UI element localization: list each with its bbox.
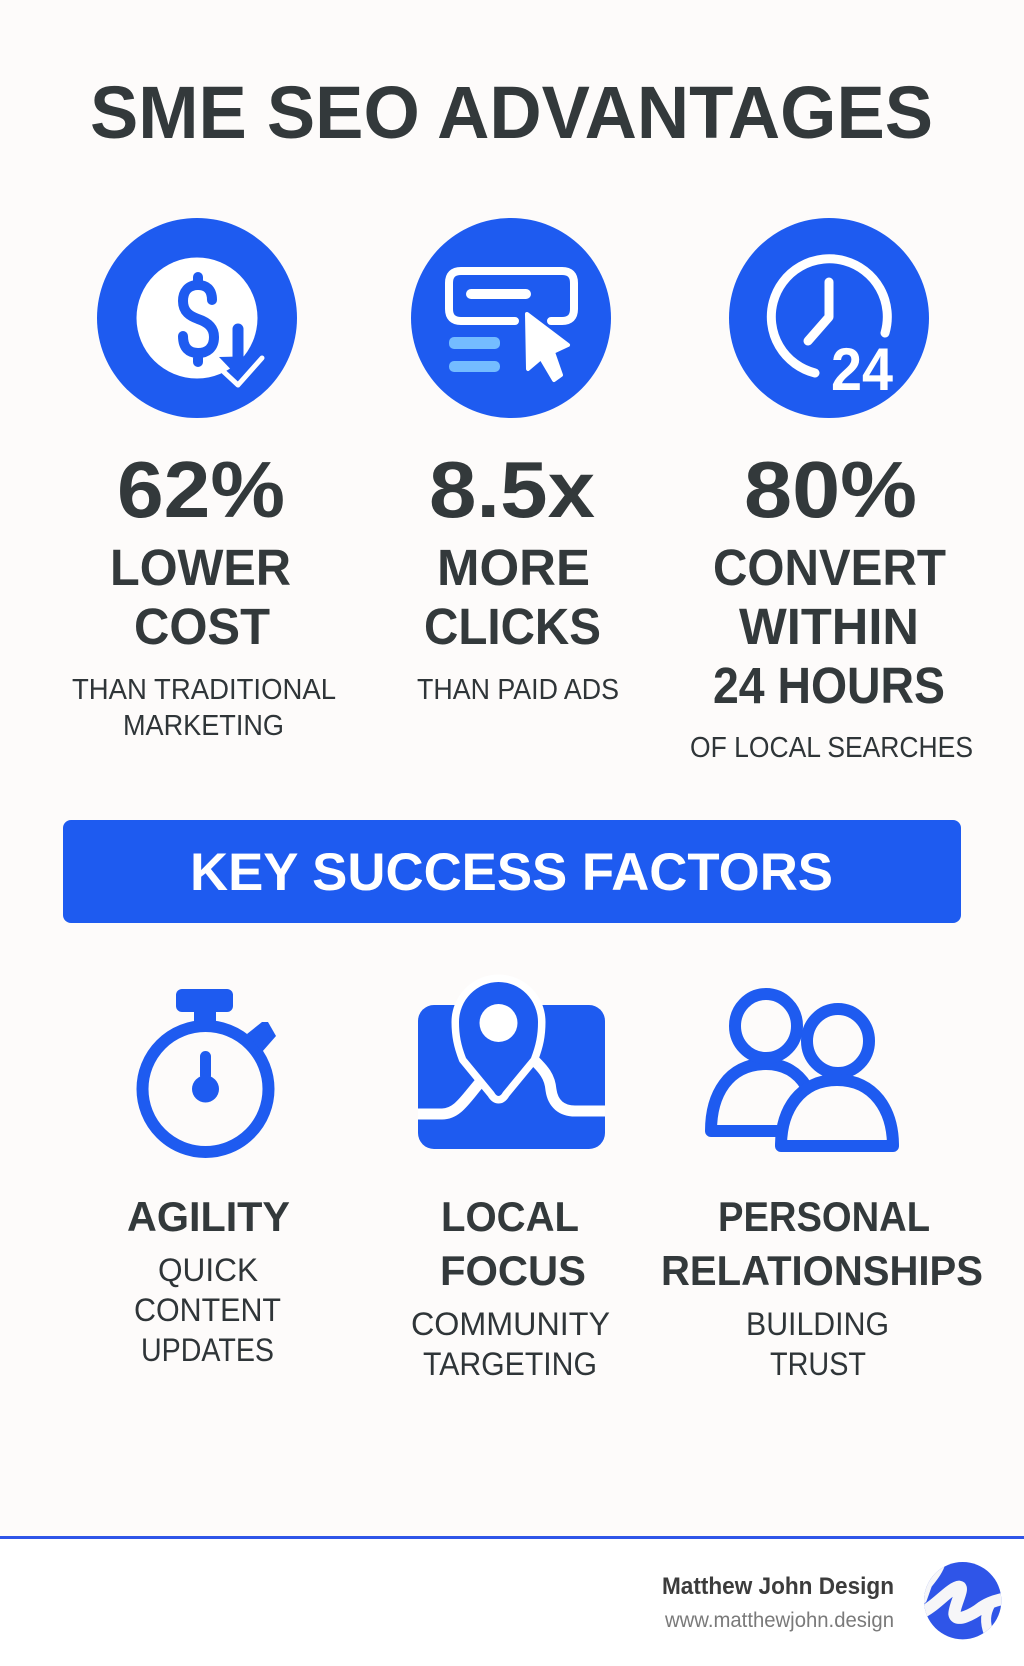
panel: convert within 24 hours stat [690, 218, 973, 764]
footer [0, 1536, 1024, 1640]
stat note: than paid ads: THAN PAID ADS [417, 674, 619, 706]
stat note: of local searches: OF LOCAL SEARCHES [690, 732, 973, 764]
note: quick content updates: CONTENT [134, 1292, 281, 1328]
banner: key success factors: KEY SUCCESS FACTORS [190, 843, 833, 902]
note: quick content updates: UPDATES [141, 1332, 274, 1368]
stat value: 80%: 80% [744, 445, 917, 534]
panel: agility [127, 989, 290, 1368]
stat label: more clicks: CLICKS [424, 598, 601, 655]
icon: two people [711, 994, 893, 1146]
icon: 24 hour clock [729, 218, 929, 418]
label: local focus: FOCUS [440, 1247, 586, 1294]
panel: local focus [411, 982, 610, 1382]
stat label: more clicks [424, 539, 601, 655]
stat label: convert within 24 hours [713, 539, 946, 714]
note: building trust [746, 1306, 889, 1382]
stat value: 62%: 62% [117, 445, 285, 534]
note: community targeting: COMMUNITY [411, 1306, 610, 1342]
stat note: than traditional marketing: THAN TRADITIONAL [72, 674, 336, 706]
icon: logo [924, 1562, 1002, 1640]
footer brand name: Matthew John Design [662, 1573, 894, 1600]
stat label: lower cost: LOWER [110, 539, 291, 596]
note: building trust: BUILDING [746, 1306, 889, 1342]
icon: ad window with cursor [411, 218, 611, 418]
label: personal relationships [661, 1193, 983, 1294]
stat value: 8.5x: 8.5x [429, 445, 595, 534]
icon: stopwatch [142, 989, 276, 1152]
stat label: lower cost: COST [134, 598, 270, 655]
panel: lower cost stat [72, 218, 336, 742]
icon: dollar with down arrow [97, 218, 297, 418]
stat label: more clicks: MORE [437, 539, 590, 596]
icon: 24 hour clock: 24 [831, 336, 894, 403]
icon: map with pin [418, 982, 605, 1149]
stat label: convert within 24 hours: WITHIN [739, 598, 919, 655]
label: agility: AGILITY [127, 1193, 290, 1240]
panel: personal relationships [661, 994, 983, 1382]
note: community targeting [411, 1306, 610, 1382]
footer url: www.matthewjohn.design [664, 1609, 894, 1632]
panel: more clicks stat [411, 218, 619, 706]
stat label: convert within 24 hours: CONVERT [713, 539, 946, 596]
label: local focus [440, 1193, 586, 1294]
stat label: lower cost [110, 539, 291, 655]
label: personal relationships: PERSONAL [718, 1193, 930, 1240]
banner: key success factors [63, 820, 961, 923]
note: building trust: TRUST [770, 1346, 866, 1382]
stat label: convert within 24 hours: 24 HOURS [713, 657, 945, 714]
stat note: than traditional marketing: MARKETING [123, 710, 284, 742]
stat note: than traditional marketing [72, 674, 336, 742]
label: personal relationships: RELATIONSHIPS [661, 1247, 983, 1294]
note: quick content updates: QUICK [158, 1252, 258, 1288]
note: community targeting: TARGETING [423, 1346, 597, 1382]
note: quick content updates [134, 1252, 281, 1368]
title: SME SEO ADVANTAGES [90, 71, 933, 154]
label: local focus: LOCAL [441, 1193, 579, 1240]
